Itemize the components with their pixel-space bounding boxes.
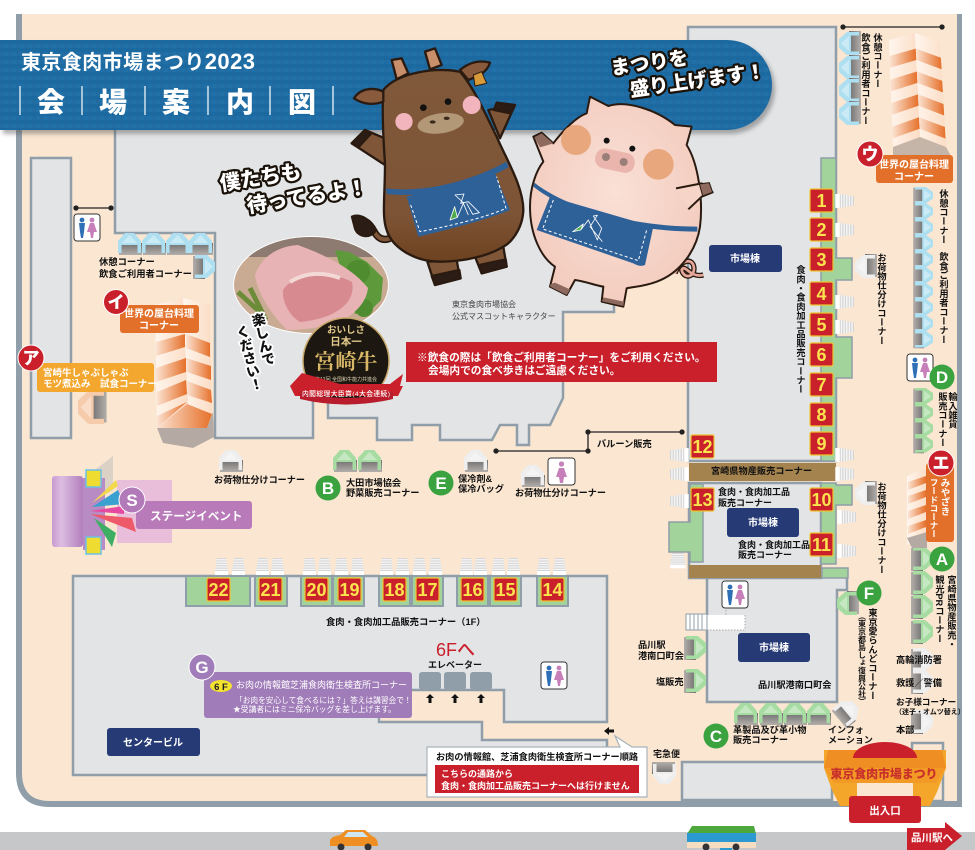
label: world food corner イ: コーナー <box>139 320 179 332</box>
label: rest corner upper left <box>99 256 192 279</box>
icon: car <box>330 830 378 850</box>
label: balloon sales: バルーン販売 <box>597 438 652 449</box>
label: leather goods: 販売コーナー <box>733 734 788 745</box>
label: mascot caption <box>452 299 556 321</box>
stage event <box>52 456 172 554</box>
stalls: rest corner upper left <box>118 233 215 279</box>
pig apron <box>533 183 697 266</box>
label: luggage corner centre: お荷物仕分けコーナー <box>515 487 606 498</box>
vertical labels: お荷物仕分けコーナー <box>876 253 887 345</box>
markers: green: C <box>710 727 722 746</box>
cow tail <box>352 216 390 239</box>
label: world food corner ウ: 世界の屋台料理 <box>879 158 949 171</box>
vertical labels: 飲食ご利用者コーナー <box>860 32 871 125</box>
booths: 1 to 13 <box>691 189 833 556</box>
booths: 1 to 13: 5 <box>816 315 827 335</box>
stall: shabu-shabu tasting <box>78 389 107 424</box>
icon: restroom centre <box>541 662 567 689</box>
vertical labels: 食肉・食肉加工品販売コーナー <box>795 264 806 394</box>
mascot: cow <box>352 48 523 285</box>
icon: women's restroom <box>548 458 575 485</box>
label: rest corner upper left: 飲食ご利用者コーナー <box>99 268 192 279</box>
speech: we are waiting: 僕たちも <box>218 160 303 196</box>
markers: green: D <box>936 368 948 387</box>
speech: festival cheer: まつりを <box>609 47 690 80</box>
floor plan: white stair area <box>686 607 745 630</box>
vertical labels: （東京都島しょ復興公社） <box>857 612 866 706</box>
label: cooling packs: 保冷バッグ <box>458 483 504 494</box>
badge: Miyazaki beef: おいしさ <box>327 325 365 336</box>
stalls: rest corner right column <box>913 187 933 348</box>
stalls: rest corner top right <box>839 31 861 125</box>
label: salt sales: 塩販売 <box>656 676 684 687</box>
cow body <box>383 70 523 262</box>
panel: Meat information hall G <box>204 672 412 718</box>
label: meat products upper: 食肉・食肉加工品 <box>718 486 790 497</box>
notice: eating and drinking <box>406 342 717 382</box>
booths: 1 to 13: 9 <box>816 434 827 454</box>
booths: 1 to 13: 2 <box>816 220 827 240</box>
callout: route notice <box>427 736 647 797</box>
stalls: green booths <box>333 388 933 725</box>
markers: red: イ <box>108 293 124 312</box>
markers: purple: S <box>126 491 138 510</box>
panel: Meat information hall G: 6 F <box>214 682 228 693</box>
icon: restroom upper left <box>74 214 100 241</box>
title: venue map: 内 <box>226 87 254 118</box>
speech: festival cheer: 盛り上げます！ <box>628 60 767 101</box>
markers: red <box>18 141 954 476</box>
icon: restroom middle <box>722 581 748 608</box>
label: Miyazaki products corner: 宮崎県物産販売コーナー <box>711 465 812 476</box>
markers: green: A <box>936 550 948 569</box>
speech: festival cheer <box>609 37 767 104</box>
elevator to 6F: 6Fへ <box>436 640 475 660</box>
badge: Miyazaki beef: 宮崎牛 <box>314 350 378 374</box>
panel: Meat information hall G: 「お肉を安心して食べるには？」答えは講習会で！ <box>235 695 412 705</box>
callout: route notice: お肉の情報館、芝浦食肉衛生検査所コーナー順路 <box>436 751 639 762</box>
booths: 1 to 13: 4 <box>816 284 827 304</box>
markers: purple: G <box>195 658 209 677</box>
markers: green: E <box>435 474 447 493</box>
label: luggage corner left: お荷物仕分けコーナー <box>214 474 305 485</box>
booths: 1 to 13: 8 <box>816 405 827 425</box>
rope lines <box>74 25 944 453</box>
badge: Miyazaki beef: 第12回 全国和牛能力共進会 <box>315 376 377 383</box>
booths: 1 to 13: 3 <box>816 250 827 270</box>
vertical labels: 宮崎県物産販売・ <box>946 574 957 649</box>
label: leather goods <box>733 724 806 745</box>
booths: 1 to 13: 11 <box>812 535 831 555</box>
label: service corners: お子様コーナー <box>896 696 956 707</box>
arrow: to Shinagawa station <box>907 822 962 850</box>
photo: Miyazaki beef <box>230 235 395 335</box>
label: Shinagawa town association: 港南口町会 <box>638 650 685 661</box>
notice: eating and drinking: ※飲食の際は「飲食ご利用者コーナー」をご利用ください。 <box>417 351 706 364</box>
vertical labels <box>795 32 958 706</box>
callout: route notice: こちらの通路から <box>441 768 513 779</box>
stalls: white luggage and info booths <box>219 254 933 784</box>
entrance gate: 東京食肉市場まつり <box>830 766 938 781</box>
label: service corners: 高輪消防署 <box>896 654 942 665</box>
label: mascot caption: 公式マスコットキャラクター <box>452 311 556 321</box>
cow horns <box>392 48 442 79</box>
title: venue map: 会 <box>37 87 65 118</box>
road <box>0 832 975 850</box>
markers: red: ウ <box>862 145 878 164</box>
badge: Miyazaki beef: 内閣総理大臣賞(4大会連続) <box>302 389 390 398</box>
label: Shinagawa town association <box>638 640 685 661</box>
tower: world food stall イ <box>155 298 214 448</box>
booths: 14 to 22: 18 <box>384 580 405 600</box>
label: meat products upper: 販売コーナー <box>718 497 772 508</box>
booths: 14 to 22: 19 <box>339 580 360 600</box>
markers: green: F <box>864 584 874 603</box>
vertical labels: 休憩コーナー <box>872 32 883 88</box>
notice: eating and drinking: 会場内での食べ歩きはご遠慮ください。 <box>428 364 620 377</box>
cow apron <box>386 162 510 237</box>
entrance gate <box>824 742 946 823</box>
callout: route notice: 食肉・食肉加工品販売コーナーへは行けません <box>441 780 630 791</box>
label: information: インフォ <box>828 725 864 735</box>
seats: right column <box>670 194 856 568</box>
booths: 1 to 13: 12 <box>692 437 713 457</box>
navy building labels <box>107 245 810 756</box>
markers: purple <box>119 487 215 680</box>
title: venue map: 場 <box>99 87 127 118</box>
mascot: pig <box>530 97 713 307</box>
title: venue map: 案 <box>162 87 190 118</box>
banner <box>0 40 772 130</box>
arrow: to Shinagawa station: 品川駅へ <box>911 832 953 844</box>
label: world food corner イ: 世界の屋台料理 <box>124 307 194 320</box>
booths: 14 to 22: 15 <box>495 580 516 600</box>
speech: please enjoy <box>231 310 282 393</box>
label: world food corner イ <box>120 305 199 333</box>
vertical labels: お荷物仕分けコーナー <box>876 482 887 574</box>
label: leather goods: 革製品及び革小物 <box>733 724 806 735</box>
label: mascot caption: 東京食肉市場協会 <box>452 299 516 309</box>
vertical labels: 輸入雑貨 <box>947 391 958 430</box>
navy building labels: センタービル <box>123 736 183 749</box>
markers: green <box>316 364 954 748</box>
pig face <box>561 125 674 180</box>
label: stage event <box>136 501 252 529</box>
label: shabu-shabu tasting corner <box>37 363 157 392</box>
label: parcel delivery: 宅急便 <box>653 748 680 759</box>
title: festival name: 東京食肉市場まつり2023 <box>21 49 255 74</box>
tower: world food stall ウ <box>889 33 951 156</box>
label: service corners: 救護／警備 <box>896 677 942 688</box>
navy building labels: 市場棟 <box>748 516 778 529</box>
label: Ota market vegetables: 大田市場協会 <box>346 477 402 488</box>
navy building labels: 市場棟 <box>759 641 789 654</box>
label: stage event: ステージイベント <box>150 510 243 523</box>
elevator to 6F <box>419 640 492 703</box>
vertical labels: 飲食ご利用者コーナー <box>938 251 949 344</box>
navy building labels: 市場棟 <box>730 252 760 265</box>
panel: Meat information hall G: お肉の情報館芝浦食肉衛生検査所コーナー <box>236 679 407 690</box>
floor plan: brown bands <box>689 463 836 578</box>
title: venue map <box>20 86 333 118</box>
label: world food corner ウ: コーナー <box>894 171 934 183</box>
speech: please enjoy: ください！ <box>233 324 264 393</box>
label: meat products lower <box>738 539 810 560</box>
label: cooling packs <box>458 473 504 494</box>
booths: 1 to 13: 7 <box>816 375 827 395</box>
label: meat products 1F: 食肉・食肉加工品販売コーナー（1F） <box>326 616 486 627</box>
pig arm <box>676 183 713 209</box>
pig tail <box>675 261 703 276</box>
markers: red: ア <box>22 349 40 368</box>
entrance gate: 出入口 <box>869 804 901 817</box>
panel: Meat information hall G: ★受講者にはミニ保冷バッグを差し上げます。 <box>233 704 396 714</box>
label: information: メーション <box>828 735 873 745</box>
booths: 14 to 22: 21 <box>260 580 281 600</box>
label: shabu-shabu tasting corner: モツ煮込み 試食コーナー <box>43 378 157 390</box>
label: Miyazaki food corner: フードコーナー <box>929 478 939 538</box>
speech: we are waiting: 待ってるよ！ <box>245 176 369 218</box>
booths: 14 to 22 <box>186 576 568 606</box>
label: information <box>828 725 873 745</box>
booths: 1 to 13: 13 <box>692 490 713 510</box>
badge: Miyazaki beef: 日本一 <box>330 335 362 348</box>
markers: green: B <box>322 479 334 498</box>
vertical labels: 観光PRコーナー <box>934 574 945 643</box>
speech: please enjoy: 楽しんで <box>248 310 277 368</box>
seats: lower row <box>215 558 566 575</box>
title: venue map: 図 <box>288 87 316 118</box>
label: Miyazaki food corner: みやざき <box>938 478 950 516</box>
label: meat products lower: 販売コーナー <box>738 549 792 560</box>
vertical labels: 休憩コーナー <box>938 188 949 244</box>
label: Ota market vegetables <box>346 477 420 498</box>
label: meat products upper <box>718 486 790 508</box>
vertical labels: 販売コーナー <box>937 392 948 447</box>
label: service corners: 本部 <box>896 724 914 735</box>
label: service corners <box>895 654 965 735</box>
pig hooves <box>534 133 624 306</box>
cow arms <box>352 103 515 165</box>
label: Miyazaki food corner <box>926 463 954 542</box>
cow legs <box>427 247 507 285</box>
booths: 1 to 13: 10 <box>811 490 832 510</box>
booths: 14 to 22: 17 <box>417 580 438 600</box>
arrow: route direction <box>604 727 614 735</box>
label: cooling packs: 保冷剤& <box>458 473 493 484</box>
booths: 14 to 22: 16 <box>462 580 483 600</box>
booths: 14 to 22: 22 <box>208 580 229 600</box>
booths: 1 to 13: 1 <box>816 191 827 211</box>
markers: red: エ <box>932 454 950 473</box>
tower: Miyazaki food ＥＣ <box>907 468 927 548</box>
icon: bus <box>687 826 756 850</box>
booths: 14 to 22: 14 <box>542 580 563 600</box>
vertical labels: 東京愛らんどコーナー <box>867 607 878 700</box>
speech: we are waiting <box>218 150 369 221</box>
booths: 1 to 13: 6 <box>816 345 827 365</box>
cow face <box>395 96 481 136</box>
label: Shinagawa town association in building: 品川駅港南口町会 <box>758 679 832 690</box>
label: rest corner upper left: 休憩コーナー <box>99 256 155 267</box>
label: service corners: （迷子・オムツ替え） <box>895 707 965 716</box>
elevator to 6F: エレベーター <box>428 659 482 670</box>
label: shabu-shabu tasting corner: 宮崎牛しゃぶしゃぶ <box>43 367 129 379</box>
badge: Miyazaki beef <box>290 318 403 404</box>
pig body <box>530 97 701 307</box>
label: meat products lower: 食肉・食肉加工品 <box>738 539 810 550</box>
cow ears <box>354 61 490 104</box>
floor plan: green sales strips <box>669 158 852 578</box>
label: Shinagawa town association: 品川駅 <box>638 640 666 650</box>
icon: restroom right <box>907 354 933 381</box>
label: world food corner ウ <box>876 155 953 183</box>
label: Ota market vegetables: 野菜販売コーナー <box>346 487 420 498</box>
booths: 14 to 22: 20 <box>306 580 327 600</box>
